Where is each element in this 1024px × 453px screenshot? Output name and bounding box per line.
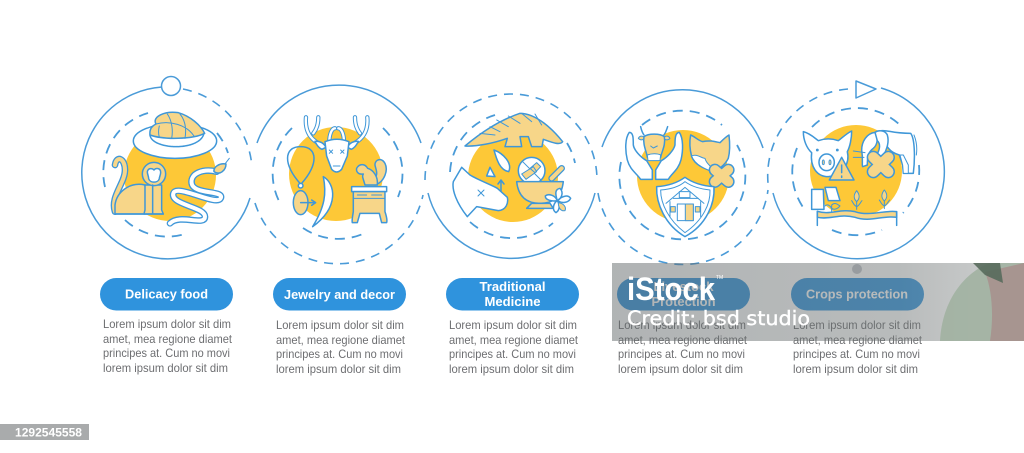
text block: crops protection: lorem ipsum dolor sit dim [793,362,918,376]
heading: delicacy food: Delicacy food [125,286,208,302]
text block: traditional medicine: Lorem ipsum dolor sit dim [449,318,577,332]
watermark band: Credit: bsd studio [627,307,810,330]
text block: delicacy food: lorem ipsum dolor sit dim [103,361,228,375]
image id tag: 1292545558 [15,426,82,440]
icon: pangolin, rhino, mortar and pestle [453,113,571,217]
text block: crops protection: Lorem ipsum dolor sit dim [793,318,921,332]
heading: traditional medicine [446,278,579,310]
text block: livestock protection [618,318,748,376]
heading: livestock protection: Protection [652,294,716,309]
text block: livestock protection: lorem ipsum dolor sit dim [618,362,743,376]
text block: crops protection: principes at. Cum no movi [793,347,920,361]
heading: delicacy food [100,278,233,310]
watermark band: iStock [627,271,715,307]
text block: livestock protection: amet, mea regione diamet [618,333,748,347]
icon: pig, elephant and damaged crops [803,131,917,225]
panel: traditional medicine [425,94,597,258]
heading: jewelry and decor [273,278,406,310]
panel: crops protection [768,81,944,259]
image id tag [0,424,89,440]
text block: delicacy food: principes at. Cum no movi [103,346,230,360]
text block: traditional medicine: principes at. Cum no movi [449,347,576,361]
heading: traditional medicine: Traditional [480,279,546,294]
text block: jewelry and decor: lorem ipsum dolor sit dim [276,362,401,376]
icon: food, monkey and snake [114,112,229,223]
text block: livestock protection: Lorem ipsum dolor sit dim [618,318,746,332]
heading: livestock protection [617,278,750,310]
panel: jewelry and decor [255,85,423,264]
heading: livestock protection: Livestock [654,279,714,294]
text block: livestock protection: principes at. Cum no movi [618,347,745,361]
text block: jewelry and decor: Lorem ipsum dolor sit dim [276,318,404,332]
heading: jewelry and decor: Jewelry and decor [284,287,395,302]
text block: crops protection: amet, mea regione diamet [793,333,923,347]
text block: jewelry and decor [276,318,406,376]
text block: jewelry and decor: amet, mea regione diamet [276,333,406,347]
panel: livestock protection [598,90,768,265]
panel: delicacy food [82,76,252,259]
icon: deer, necklace, tusk and squirrel [288,117,387,227]
text block: jewelry and decor: principes at. Cum no movi [276,347,403,361]
watermark band [612,263,1024,341]
heading: crops protection [791,278,924,310]
text block: traditional medicine: lorem ipsum dolor sit dim [449,362,574,376]
heading: crops protection: Crops protection [806,286,908,302]
text block: crops protection [793,318,923,376]
text block: delicacy food: Lorem ipsum dolor sit dim [103,317,231,331]
text block: delicacy food [103,317,233,375]
text block: traditional medicine [449,318,579,376]
text block: traditional medicine: amet, mea regione diamet [449,333,579,347]
icon: hands with cow, fox, shield with barn [626,127,730,237]
watermark band: TM [716,275,723,281]
heading: traditional medicine: Medicine [484,294,540,309]
text block: delicacy food: amet, mea regione diamet [103,332,233,346]
